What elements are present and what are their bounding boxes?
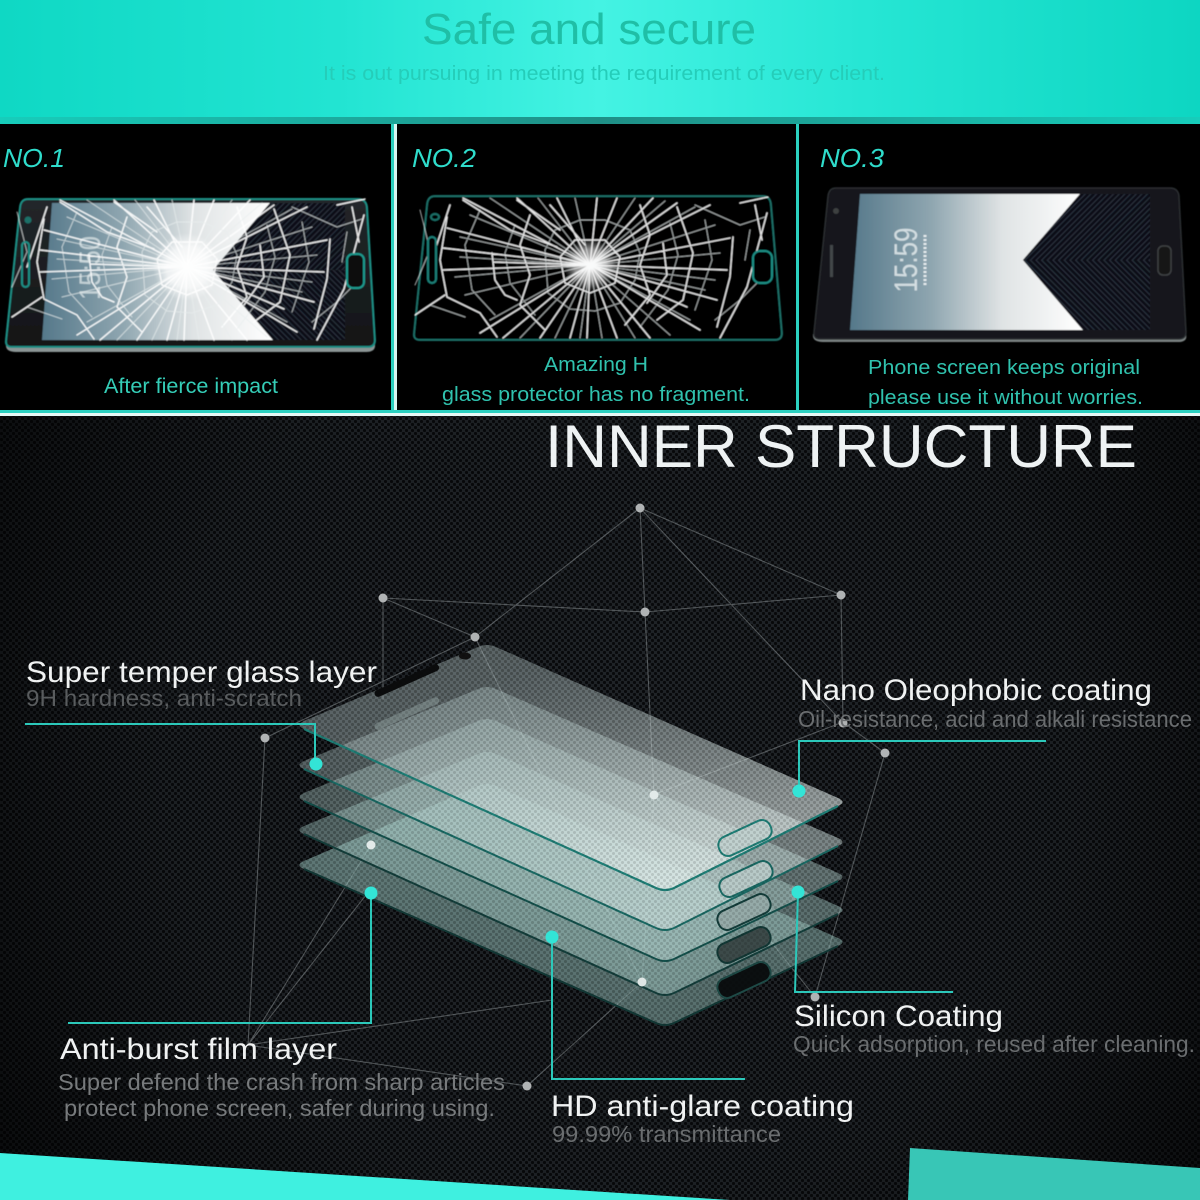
footer band left (0, 1153, 730, 1200)
caption: Phone screen keeps original (868, 357, 1140, 379)
header band (0, 0, 1200, 124)
subtitle: It is out pursuing in meeting the requirement of every client. (323, 63, 885, 85)
panel: NO.3 intact phone (813, 143, 1186, 409)
label text: HD anti-glare coating (551, 1090, 854, 1123)
layer 3: silicon coating (300, 719, 842, 961)
label text: Silicon Coating (794, 1000, 1003, 1033)
caption: After fierce impact (104, 375, 278, 398)
label text: Nano Oleophobic coating (800, 674, 1152, 707)
wireframe nodes (260, 504, 890, 1090)
intact phone (813, 188, 1186, 342)
caption: Amazing H (544, 354, 648, 376)
glass layer stack (295, 643, 847, 1027)
panel: NO.2 glass protector (412, 143, 782, 406)
layer 5: anti-burst film (300, 784, 842, 1025)
label description: Super defend the crash from sharp articles (58, 1069, 505, 1095)
panel: NO.3 intact phone: please use it without worries. (868, 387, 1143, 409)
callout: HD anti-glare coating (546, 930, 854, 1147)
footer band right (908, 1148, 1200, 1200)
callout: nano oleophobic coating (792, 674, 1192, 798)
intact phone: 15:59 (888, 228, 924, 292)
cracked protector outline (414, 196, 782, 340)
layer 4: HD anti-glare (300, 752, 842, 995)
label text: Super temper glass layer (26, 656, 377, 689)
NO.3 heading: NO.3 (820, 143, 885, 173)
label description: 99.99% transmittance (552, 1121, 781, 1147)
phone with cracked screen and protector (6, 199, 375, 352)
panel row background (0, 124, 1200, 416)
NO.2 heading: NO.2 (412, 143, 477, 173)
NO.1 heading: NO.1 (3, 143, 65, 173)
label description: 9H hardness, anti-scratch (26, 685, 302, 711)
mesh texture over the glass (295, 643, 847, 1027)
phone with cracked screen and protector: 15:50 (74, 236, 107, 300)
layer 1: super temper glass (300, 645, 842, 890)
title: Safe and secure (422, 5, 756, 54)
heading: inner structure: INNER STRUCTURE (545, 413, 1137, 480)
callout: anti-burst film layer (58, 886, 505, 1121)
label text: Anti-burst film layer (60, 1033, 337, 1066)
callout: super temper glass layer (25, 656, 377, 770)
callout: silicon coating (792, 886, 1195, 1057)
callout: anti-burst film layer: protect phone screen, safer during using. (64, 1095, 495, 1121)
panel: NO.1 after fierce impact (3, 143, 375, 398)
panel: inner structure background (0, 416, 1200, 1200)
panel: NO.2 glass protector: glass protector has no fragment. (442, 384, 750, 406)
label description: Oil-resistance, acid and alkali resistance (798, 706, 1192, 732)
label description: Quick adsorption, reused after cleaning. (793, 1031, 1195, 1057)
wireframe network behind the glass (248, 508, 885, 1086)
layer 2: oleophobic underlay (300, 687, 842, 930)
